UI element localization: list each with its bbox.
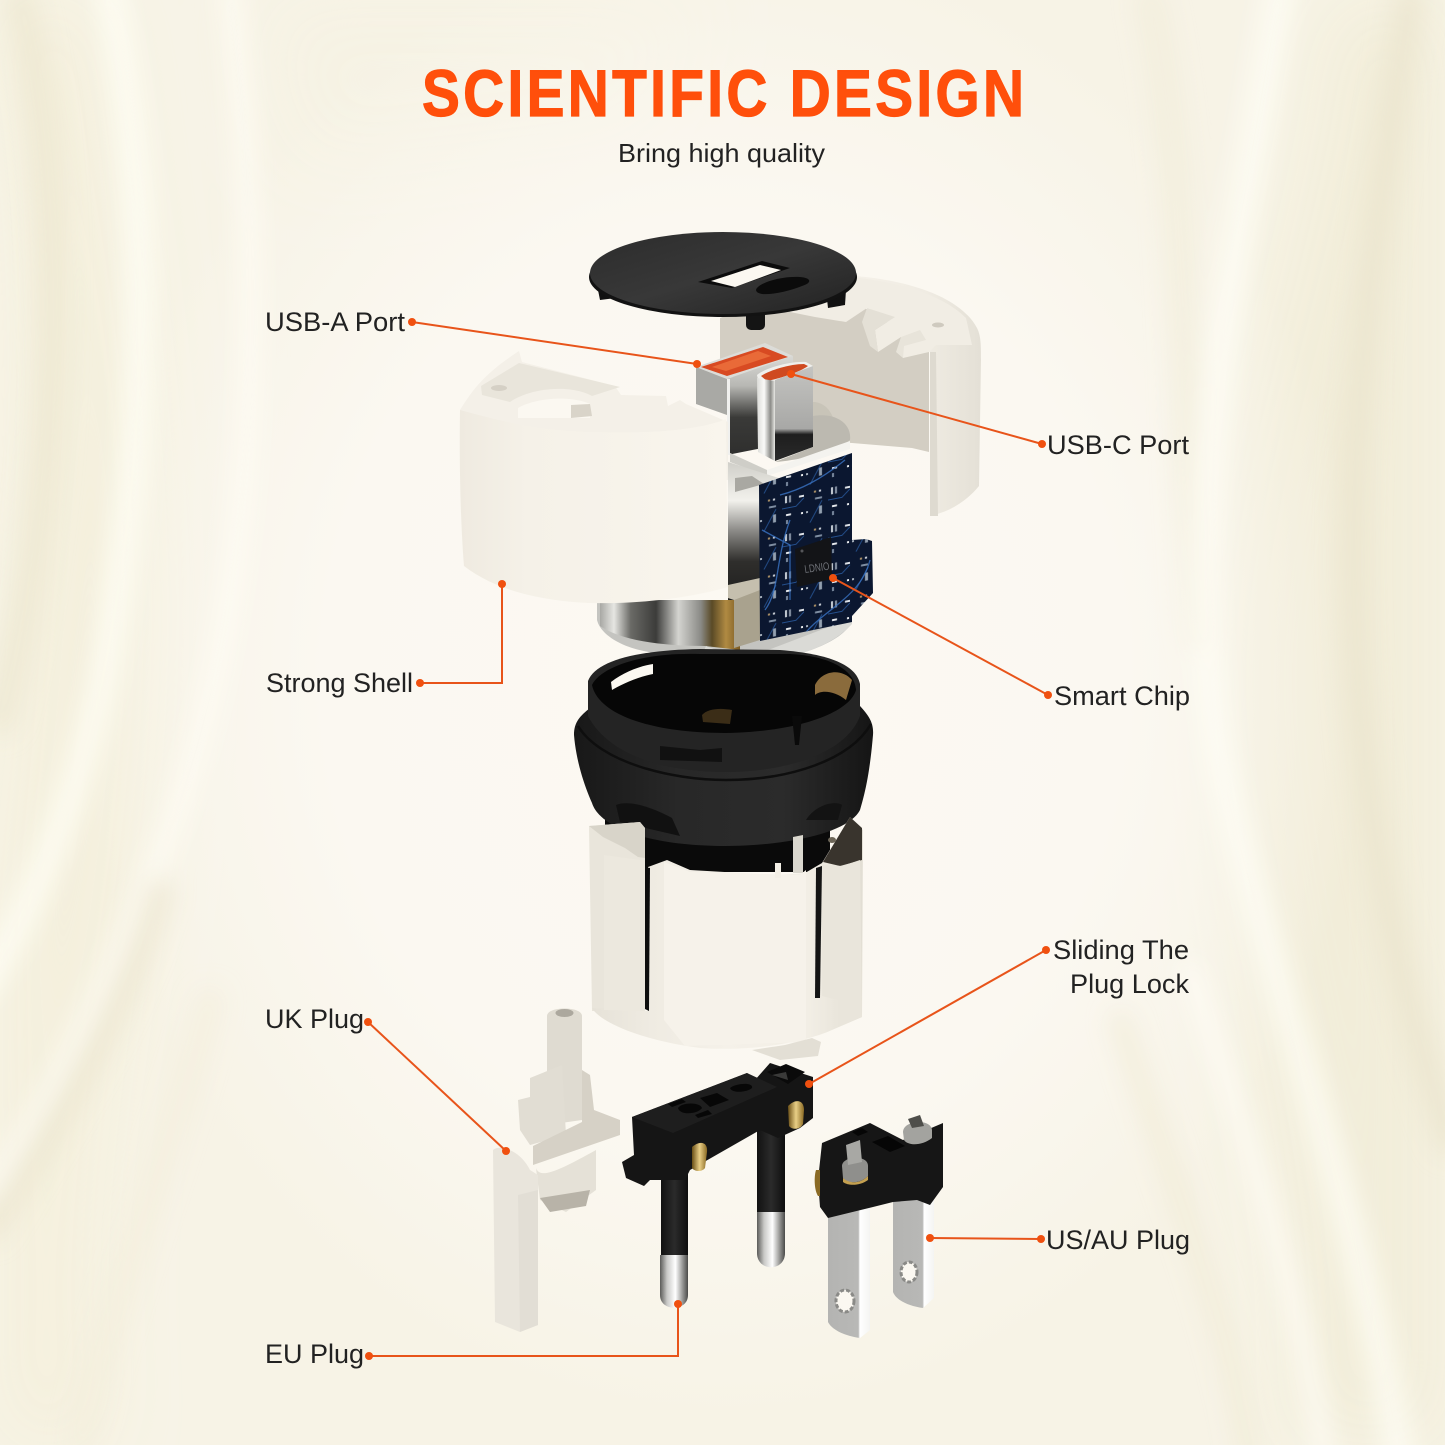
callout: UK Plug (265, 1004, 510, 1155)
smart chip: circuit board (759, 453, 873, 641)
main chip: LDNIO (804, 561, 830, 576)
callout: USB-A Port (265, 307, 701, 368)
front half of shell (460, 351, 728, 603)
main chip (795, 537, 832, 587)
callout: US/AU Plug: US/AU Plug (1046, 1225, 1190, 1255)
inner transformer column (728, 462, 785, 600)
callout: USB-C Port: USB-C Port (1047, 430, 1189, 460)
top cap: black disk (589, 232, 857, 330)
lower circuit disc (597, 578, 852, 665)
callout: USB-C Port (787, 370, 1189, 460)
callout: Sliding The Plug Lock (805, 935, 1189, 1088)
callout: Strong Shell: Strong Shell (266, 668, 413, 698)
callout: UK Plug: UK Plug (265, 1004, 364, 1034)
callout: Sliding The Plug Lock: Plug Lock (1070, 969, 1189, 999)
callout: Smart Chip: Smart Chip (1054, 681, 1190, 711)
callout: US/AU Plug (926, 1225, 1190, 1255)
title: SCIENTIFIC DESIGN (422, 57, 1024, 131)
exploded charger illustration (460, 232, 981, 1338)
white lower body (589, 817, 863, 1060)
upper metal plate (730, 402, 850, 476)
callout: Strong Shell (266, 580, 506, 698)
UK plug (493, 1008, 620, 1332)
collar: black middle housing (574, 649, 873, 872)
callout: Smart Chip (829, 574, 1190, 711)
subtitle: Bring high quality (618, 138, 825, 168)
back half of shell (720, 275, 981, 516)
callout: Sliding The Plug Lock: Sliding The (1053, 935, 1189, 965)
callout: EU Plug (265, 1300, 682, 1369)
US/AU plug (815, 1115, 943, 1338)
callout: EU Plug: EU Plug (265, 1339, 364, 1369)
USB-C port (757, 362, 813, 461)
EU plug (622, 1063, 813, 1308)
USB-A port (696, 343, 793, 455)
callout: USB-A Port: USB-A Port (265, 307, 406, 337)
